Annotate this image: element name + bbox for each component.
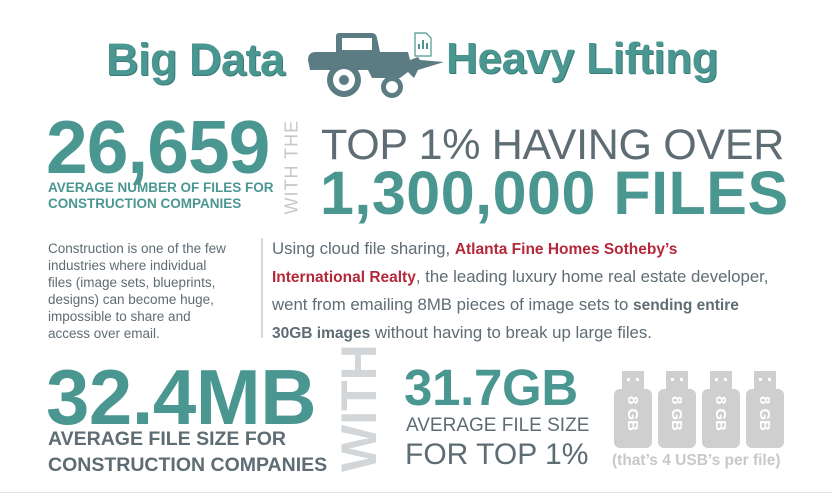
icon: 4 USB drives: 8 GB bbox=[712, 396, 729, 431]
stat: 26,659: AVERAGE NUMBER OF FILES FOR bbox=[48, 180, 274, 195]
stat: 31.7GB: FOR TOP 1% bbox=[405, 438, 588, 471]
title left: Big Data bbox=[106, 34, 285, 85]
icon: 4 USB drives: 8 GB bbox=[756, 396, 773, 431]
vertical label: with: WITH bbox=[331, 344, 387, 472]
icon: 4 USB drives: 8 GB bbox=[624, 396, 641, 431]
icon: 4 USB drives: 8 GB bbox=[668, 396, 685, 431]
stat: 32.4MB: CONSTRUCTION COMPANIES bbox=[48, 454, 327, 476]
stat: top 1%: TOP 1% HAVING OVER bbox=[321, 121, 784, 169]
text: construction note: industries where individual bbox=[48, 258, 206, 273]
icon: tractor bbox=[308, 32, 444, 98]
stat: 26,659: CONSTRUCTION COMPANIES bbox=[48, 196, 241, 211]
text: case study: went from emailing 8MB pieces of image sets to sending entire bbox=[272, 295, 739, 314]
stat: top 1%: 1,300,000 FILES bbox=[320, 159, 789, 227]
text: case study: 30GB images without having to break up large files. bbox=[272, 323, 652, 342]
text: construction note: access over email. bbox=[48, 326, 160, 341]
text: case study bbox=[272, 239, 768, 342]
stat: 31.7GB bbox=[404, 359, 589, 471]
stat: top 1% bbox=[320, 121, 789, 227]
text: case study: International Realty, the leading luxury home real estate developer, bbox=[272, 267, 768, 286]
text: case study: Using cloud file sharing, Atlanta Fine Homes Sotheby’s bbox=[272, 239, 677, 258]
stat: 31.7GB: AVERAGE FILE SIZE bbox=[406, 415, 589, 436]
text: construction note: Construction is one of the few bbox=[48, 241, 226, 256]
text: construction note: files (image sets, blueprints, bbox=[48, 275, 215, 290]
text: construction note: designs) can become huge, bbox=[48, 292, 214, 307]
stat: 31.7GB: 31.7GB bbox=[404, 359, 578, 416]
stat: 32.4MB: 32.4MB bbox=[46, 353, 316, 441]
icon: 4 USB drives bbox=[612, 371, 784, 469]
text: construction note: impossible to share and bbox=[48, 309, 191, 324]
stat: 32.4MB: AVERAGE FILE SIZE FOR bbox=[48, 428, 286, 450]
icon: 4 USB drives: (that’s 4 USB’s per file) bbox=[612, 452, 781, 469]
title right: Heavy Lifting bbox=[446, 34, 718, 83]
stat: 32.4MB bbox=[46, 353, 327, 476]
stat: 26,659: 26,659 bbox=[46, 105, 269, 189]
text: construction note bbox=[48, 241, 226, 341]
vertical label: with the: WITH THE bbox=[282, 120, 302, 214]
